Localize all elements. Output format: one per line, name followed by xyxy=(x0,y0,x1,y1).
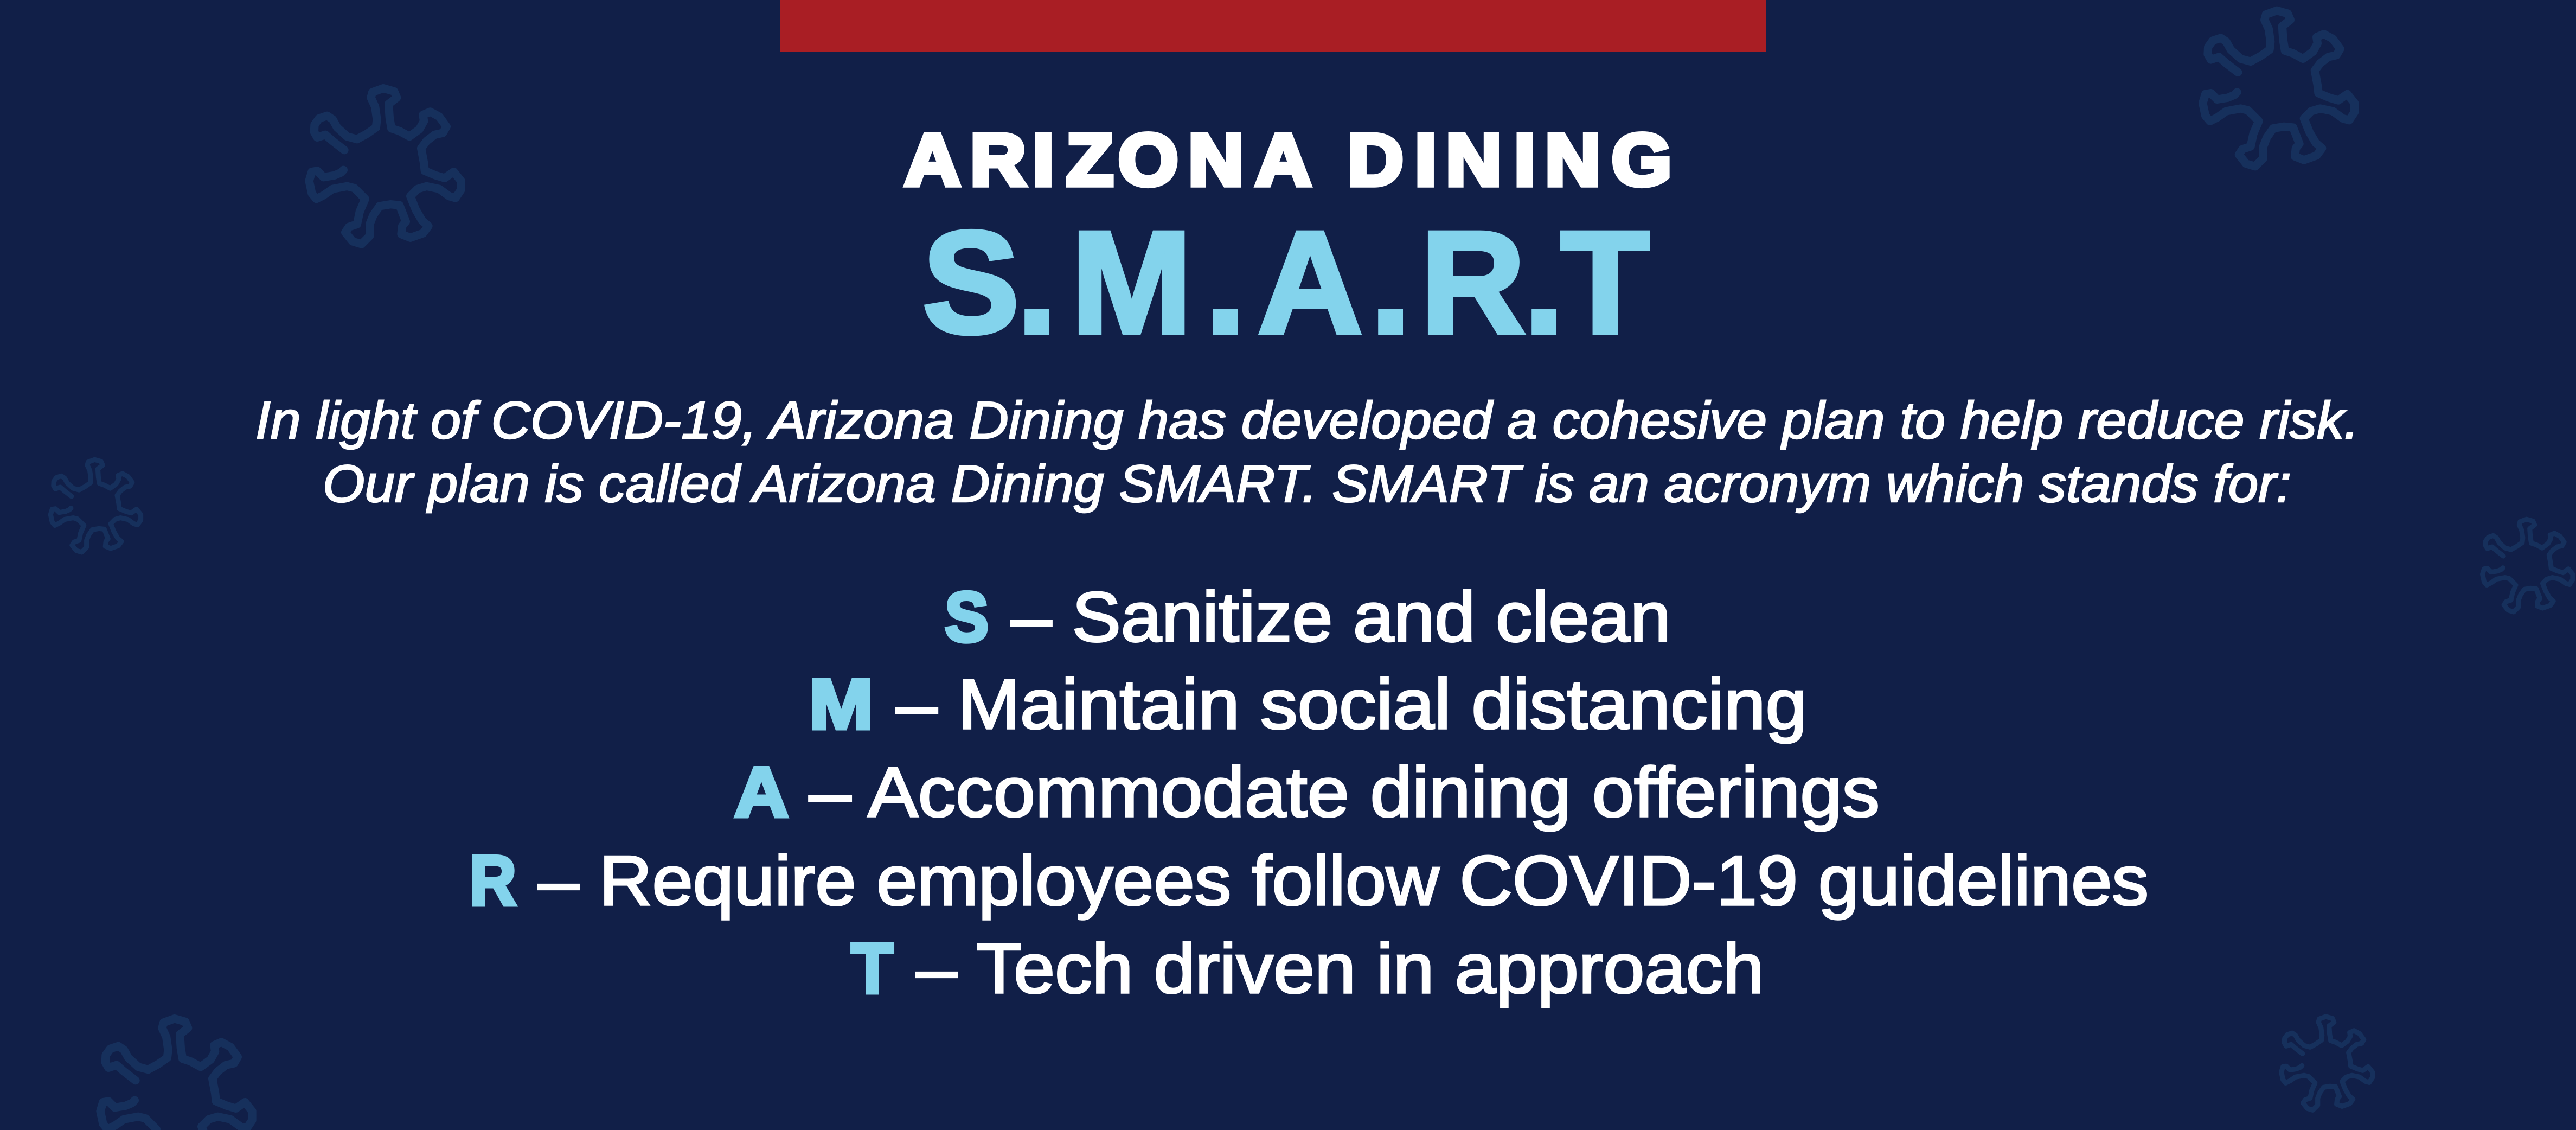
red top bar xyxy=(780,0,1766,52)
intro line 2: Our plan is called Arizona Dining SMART. SMART is an acronym which stands for: xyxy=(323,454,2291,513)
intro line 1: In light of COVID-19, Arizona Dining has developed a cohesive plan to help reduce risk. xyxy=(255,391,2359,450)
list item S xyxy=(945,577,1671,656)
intro paragraph xyxy=(255,391,2359,513)
title: Arizona Dining: ARIZONA DINING xyxy=(905,119,1671,201)
list item T xyxy=(851,929,1764,1008)
text: accommodate: – Accommodate dining offerings xyxy=(809,752,1880,832)
letter A: A xyxy=(734,752,789,832)
icon: virus top right xyxy=(2203,10,2355,167)
list item M xyxy=(809,665,1807,744)
icon: virus middle right xyxy=(2483,519,2573,612)
letter S: S xyxy=(945,577,989,656)
text: maintain: – Maintain social distancing xyxy=(896,665,1807,744)
list item R xyxy=(470,841,2149,920)
acronym list xyxy=(470,577,2149,1008)
text: tech: – Tech driven in approach xyxy=(916,929,1764,1008)
icon: virus top left xyxy=(309,88,461,244)
text: require: – Require employees follow COVID-19 guidelines xyxy=(538,841,2149,920)
letter T: T xyxy=(851,929,893,1008)
icon: virus middle left xyxy=(50,459,141,552)
list item A xyxy=(734,752,1880,832)
text: sanitize: – Sanitize and clean xyxy=(1011,577,1671,656)
title: S.M.A.R.T: S.M.A.R.T xyxy=(922,201,1650,363)
letter M: M xyxy=(809,665,873,744)
letter R: R xyxy=(470,841,516,920)
icon: virus bottom left xyxy=(100,1019,252,1130)
icon: virus bottom right xyxy=(2282,1017,2373,1110)
